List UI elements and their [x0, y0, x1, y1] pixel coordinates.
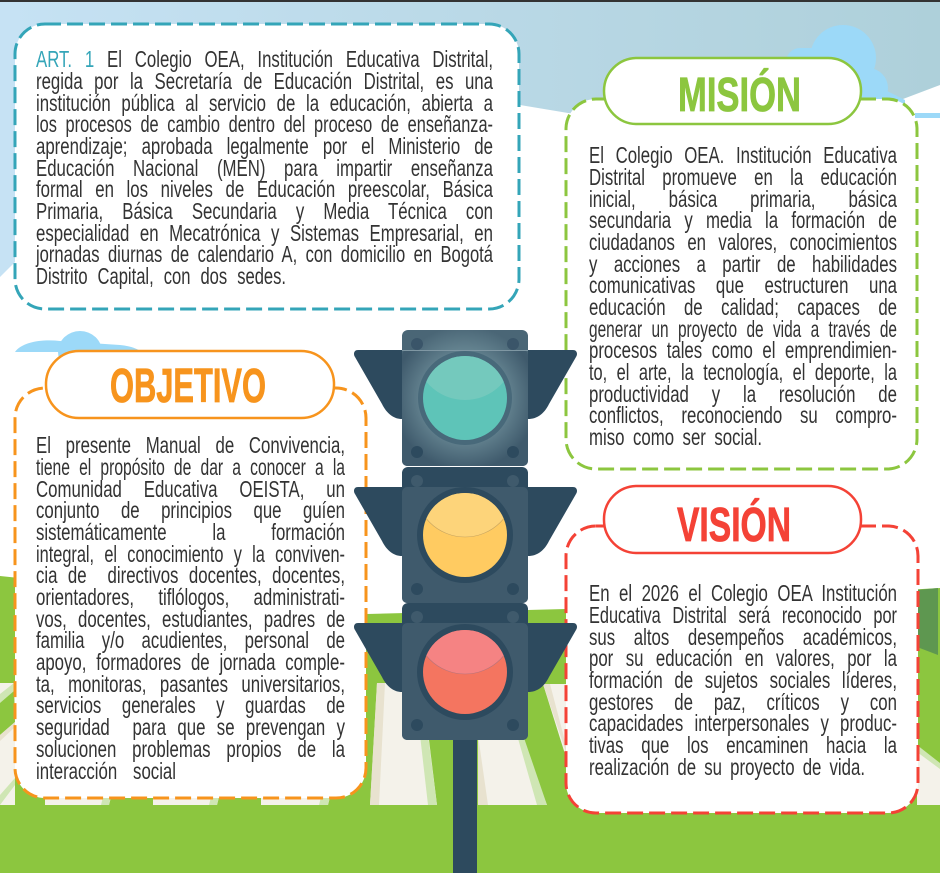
text: visión: sus altos desempeños académicos, [589, 624, 897, 650]
heading: objetivo [46, 351, 334, 418]
panel: misión [564, 56, 918, 470]
text: article 1: especialidad en Mecatrónica y Sistemas Empresarial, en [36, 220, 493, 246]
text: misión: procesos tales como el emprendimien- [589, 337, 897, 363]
text: visión: por su educación en valores, por la [589, 645, 897, 671]
text: article 1: Primaria, Básica Secundaria y Media Técnica con [36, 198, 493, 224]
text: article 1: institución pública al servicio de la educación, abierta a [36, 90, 493, 116]
text: article 1: jornadas diurnas de calendario A, con domicilio en Bogotá [36, 241, 493, 267]
text: article 1: Distrito Capital, con dos sedes. [36, 263, 286, 289]
heading: objetivo: OBJETIVO [110, 360, 266, 413]
text: visión: gestores de paz, críticos y con [589, 689, 897, 715]
text: visión [589, 580, 897, 780]
text: misión: productividad y la resolución de [589, 381, 897, 407]
text: article 1 [36, 46, 493, 289]
text: article 1: formal en los niveles de Educación preescolar, Básica [36, 176, 493, 202]
text: objetivo [36, 432, 345, 784]
text: visión: formación de sujetos sociales líderes, [589, 667, 897, 693]
text: misión: ciudadanos en valores, conocimientos [589, 229, 897, 255]
text: visión: En el 2026 el Colegio OEA Institución [589, 580, 897, 606]
heading: misión: MISIÓN [678, 67, 801, 122]
panel: visión [564, 484, 920, 814]
text: article 1: los procesos de cambio dentro del proceso de enseñanza- [36, 111, 493, 137]
text: article 1: Educación Nacional (MEN) para impartir enseñanza [36, 155, 493, 181]
text: objetivo: orientadores, tiflólogos, administrati- [36, 584, 345, 610]
text: misión [589, 142, 897, 450]
text: objetivo: sistemáticamente la formación [36, 519, 345, 545]
text: article 1: regida por la Secretaría de Educación Distrital, es una [36, 68, 493, 94]
text: objetivo: tiene el propósito de dar a conocer a la [36, 454, 345, 480]
text: objetivo: solucionen problemas propios de la [36, 736, 345, 762]
text: objetivo: interacción social [36, 758, 176, 784]
text: objetivo: Comunidad Educativa OEISTA, un [36, 476, 345, 502]
text: misión: y acciones a partir de habilidades [589, 251, 897, 277]
text: objetivo: cia de directivos docentes, docentes, [36, 562, 345, 588]
text: misión: generar un proyecto de vida a través de [589, 316, 897, 342]
pole [453, 738, 477, 873]
heading: misión [604, 58, 861, 124]
text: misión: comunicativas que estructuren una [589, 272, 897, 298]
unit 3: red light [354, 603, 577, 740]
text: objetivo: servicios generales y guardas de [36, 692, 345, 718]
panel: objetivo [14, 350, 368, 800]
text: objetivo: familia y/o acudientes, personal de [36, 627, 345, 653]
text: article 1: aprendizaje; aprobada legalmente por el Ministerio de [36, 133, 493, 159]
heading: visión [604, 486, 861, 553]
text: objetivo: conjunto de principios que guíen [36, 497, 345, 523]
text: misión: El Colegio OEA. Institución Educativa [589, 142, 897, 168]
text: objetivo: seguridad para que se prevengan y [36, 714, 345, 740]
text: visión: capacidades interpersonales y produc- [589, 710, 897, 736]
text: visión: Educativa Distrital será reconocido por [589, 602, 897, 628]
unit 2: yellow light [354, 467, 577, 603]
text: objetivo: El presente Manual de Convivencia, [36, 432, 345, 458]
text: misión: Distrital promueve en la educación [589, 164, 897, 190]
unit 1: green light [354, 330, 577, 466]
text: visión: realización de su proyecto de vida. [589, 754, 865, 780]
text: misión: educación de calidad; capaces de [589, 294, 897, 320]
text: objetivo: integral, el conocimiento y la conviven- [36, 541, 345, 567]
traffic light [354, 330, 577, 873]
text: misión: conflictos, reconociendo su compro- [589, 402, 897, 428]
text: misión: to, el arte, la tecnología, el deporte, la [589, 359, 897, 385]
text: objetivo: apoyo, formadores de jornada comple- [36, 649, 345, 675]
text: misión: miso como ser social. [589, 424, 762, 450]
text: misión: inicial, básica primaria, básica [589, 186, 897, 212]
panel: article 1 [14, 22, 520, 310]
text: article 1: ART. 1 El Colegio OEA, Institución Educativa Distrital, [36, 46, 493, 72]
text: objetivo: ta, monitoras, pasantes universitarios, [36, 671, 345, 697]
text: misión: secundaria y media la formación de [589, 207, 897, 233]
heading: visión: VISIÓN [677, 497, 791, 552]
text: visión: tivas que los encaminen hacia la [589, 732, 897, 758]
text: objetivo: vos, docentes, estudiantes, padres de [36, 606, 345, 632]
